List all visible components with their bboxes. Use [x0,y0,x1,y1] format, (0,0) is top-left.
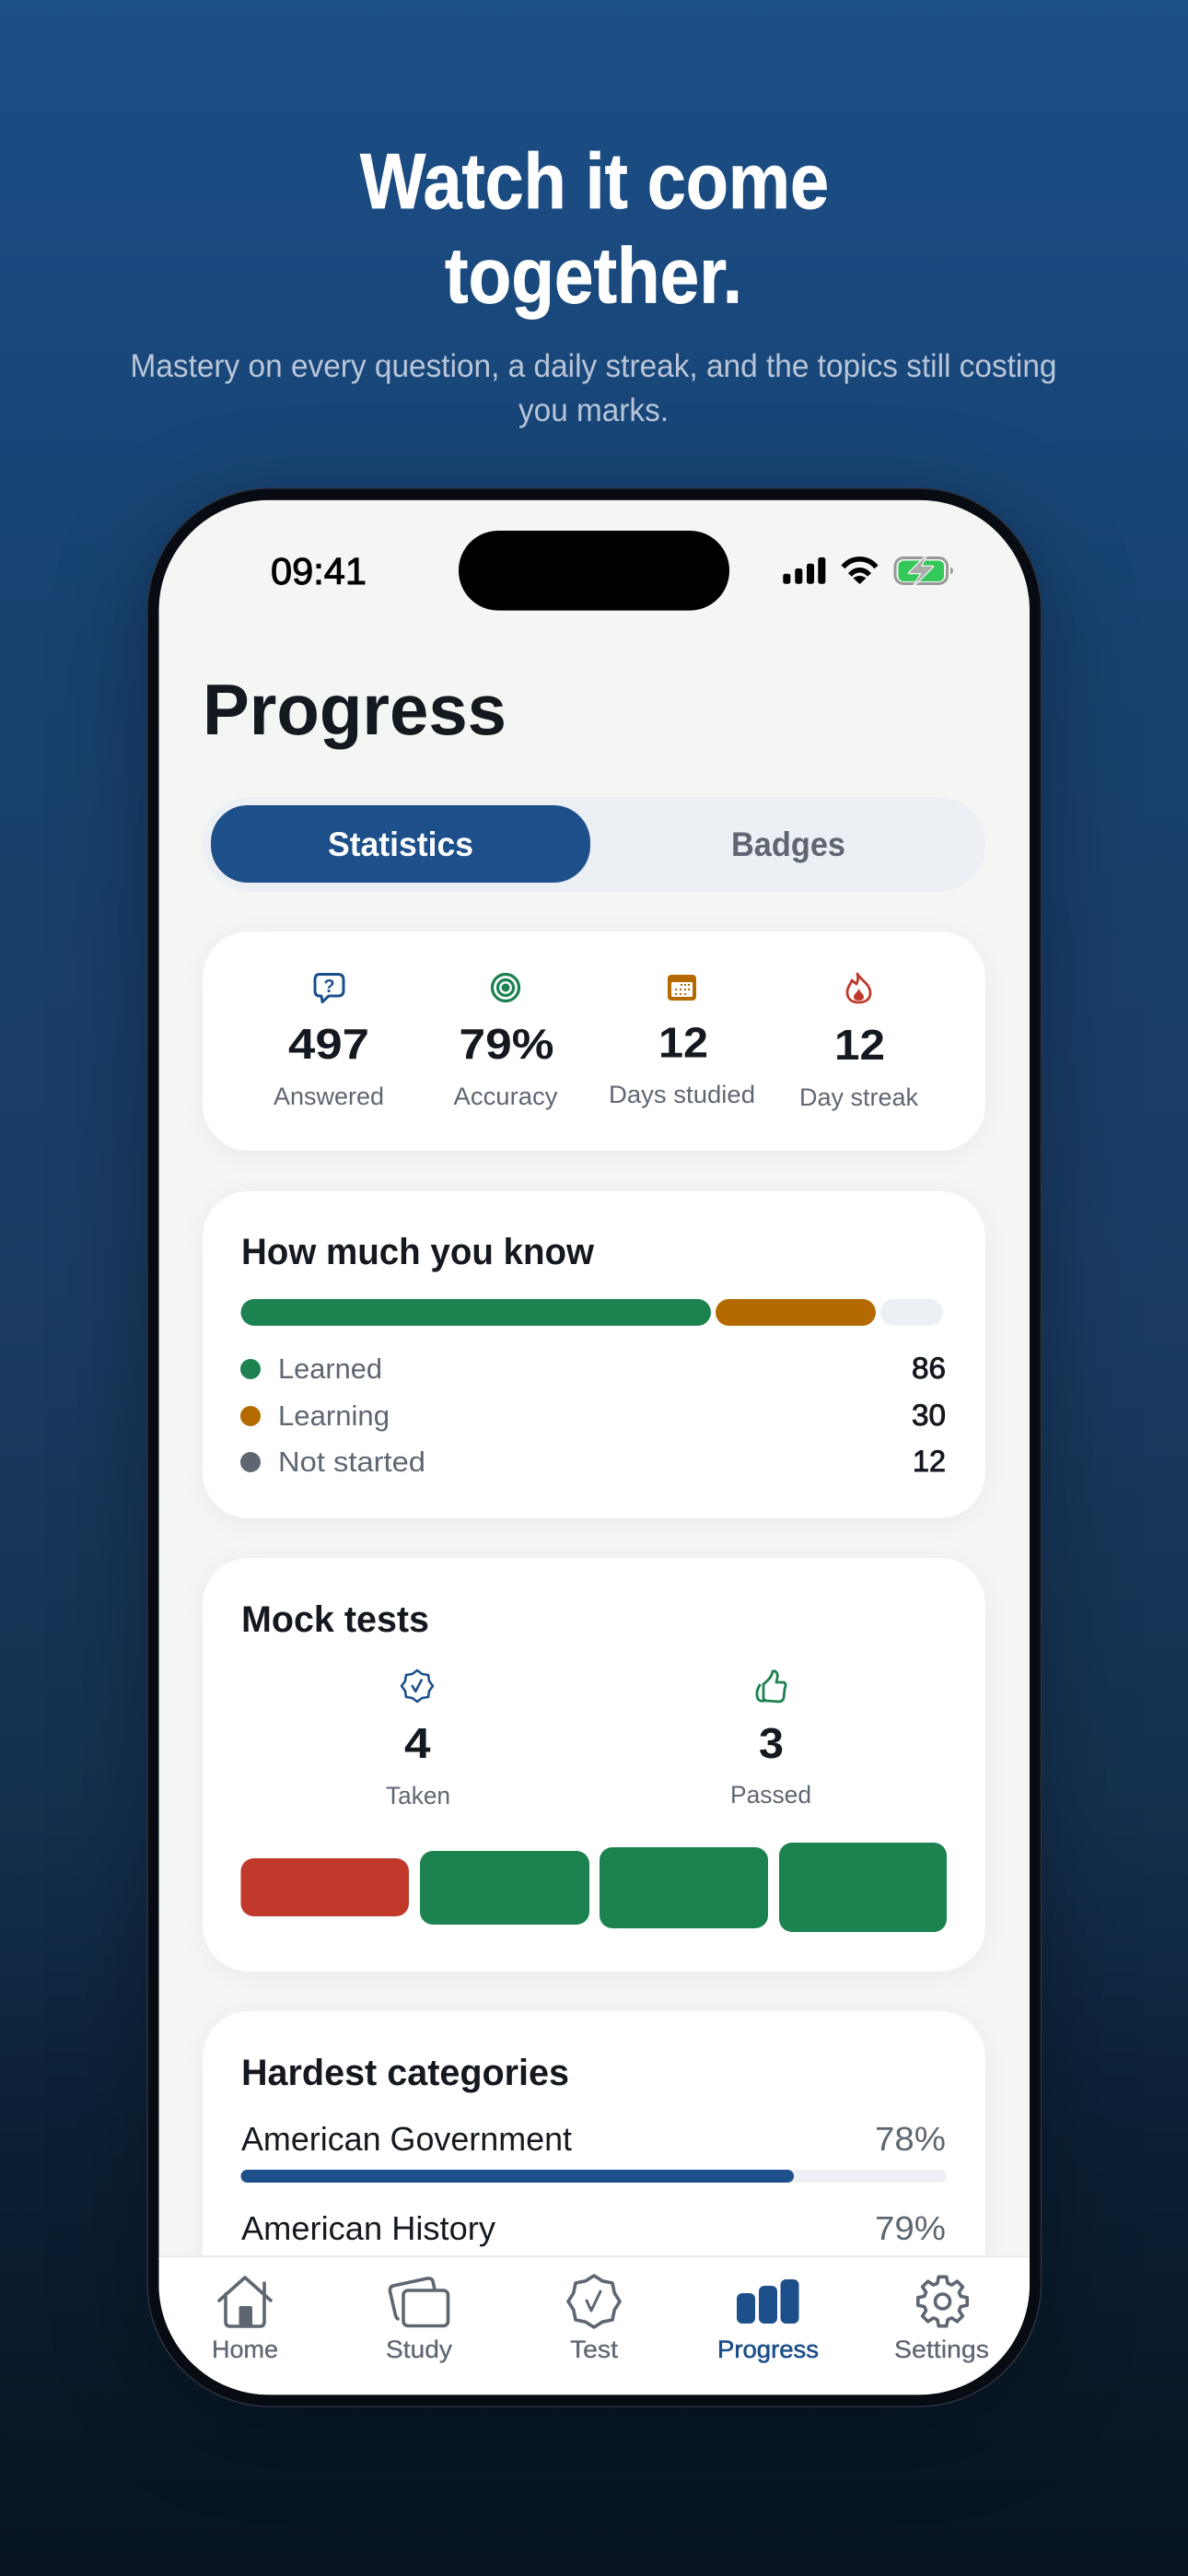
stacked progress bar [241,1299,943,1326]
phone screen [158,500,1030,2396]
stat: taken [387,1728,449,1804]
tab: test: Test [570,2336,619,2363]
stat: passed: 3 [759,1719,784,1767]
icon: calendar [668,975,696,1001]
icon: wifi [844,559,877,584]
stat: day streak [801,1030,918,1111]
category: American Government: American Government [241,2120,572,2158]
tab: progress active: Progress [717,2336,819,2363]
title [360,138,829,321]
icon: question bubble: ? [323,977,335,997]
chart: test score bars [241,1843,947,1932]
tab: study: Study [386,2336,453,2363]
title: together. [445,232,742,321]
stat: accuracy: Accuracy [453,1083,558,1110]
legend: learning: 30 [912,1399,946,1432]
icon: target [492,975,519,1001]
icon: question bubble [315,975,344,1002]
subtitle: Mastery on every question, a daily streak, and the topics still costing [131,348,1057,384]
stat: answered: 497 [288,1020,369,1068]
dynamic island [459,531,729,611]
panel: mock tests [203,1558,985,1972]
stat: taken: 4 [404,1719,431,1767]
stat: answered [274,1028,383,1106]
icon: flame [847,974,870,1002]
category: American Government: 78% [875,2120,946,2158]
tab: home: Home [212,2336,278,2363]
panel: how much you know [203,1191,985,1518]
category: American History: American History [241,2209,495,2247]
category: American Government [241,2126,947,2183]
panel: summary stats [203,931,985,1151]
legend: learned: 86 [912,1352,946,1385]
stat: passed [732,1728,810,1804]
tab: progress active [717,2279,819,2363]
label: Statistics: Statistics [328,825,473,863]
title: Watch it come [360,138,829,226]
tab: home [212,2277,278,2363]
category: American History: 79% [875,2209,946,2247]
category: American History [241,2216,945,2246]
legend: not started: Not started [278,1446,425,1478]
stat: days studied: 12 [658,1019,708,1067]
label: Badges: Badges [731,825,845,863]
heading: How much you know [241,1232,595,1272]
subtitle: you marks. [518,392,669,428]
stat: day streak: Day streak [799,1083,918,1111]
segmented control [211,805,844,883]
stat: accuracy [453,1028,558,1109]
icon: thumbs up [757,1671,786,1702]
stat: day streak: 12 [834,1021,885,1069]
phone frame [147,488,1041,2406]
tab: settings: Settings [894,2336,989,2363]
legend: not started: 12 [913,1445,946,1478]
stat: passed: Passed [730,1781,811,1809]
tab: test [568,2276,620,2363]
tab bar [158,2255,1030,2396]
subtitle [131,348,1057,428]
active tab: Statistics [211,805,590,883]
stat: taken: Taken [386,1782,450,1809]
heading: Hardest categories [241,2053,569,2093]
tab: settings [894,2277,989,2363]
legend: learning: Learning [278,1399,390,1432]
panel: hardest categories [203,2011,985,2255]
status bar time: 09:41 [271,550,367,592]
stat: days studied [611,1027,753,1107]
legend: learned: Learned [278,1352,382,1385]
stat: answered: Answered [274,1083,384,1110]
legend: learned [240,1356,945,1379]
stat: accuracy: 79% [459,1020,554,1068]
icon: seal check [402,1670,433,1702]
legend: not started [240,1450,945,1472]
heading: Progress: Progress [203,669,507,750]
icon: signal [783,557,825,584]
heading: Mock tests [241,1599,429,1640]
icon: battery charging [895,556,953,585]
stat: days studied: Days studied [609,1081,755,1108]
legend: learning [240,1404,945,1432]
tab: study [386,2278,453,2363]
